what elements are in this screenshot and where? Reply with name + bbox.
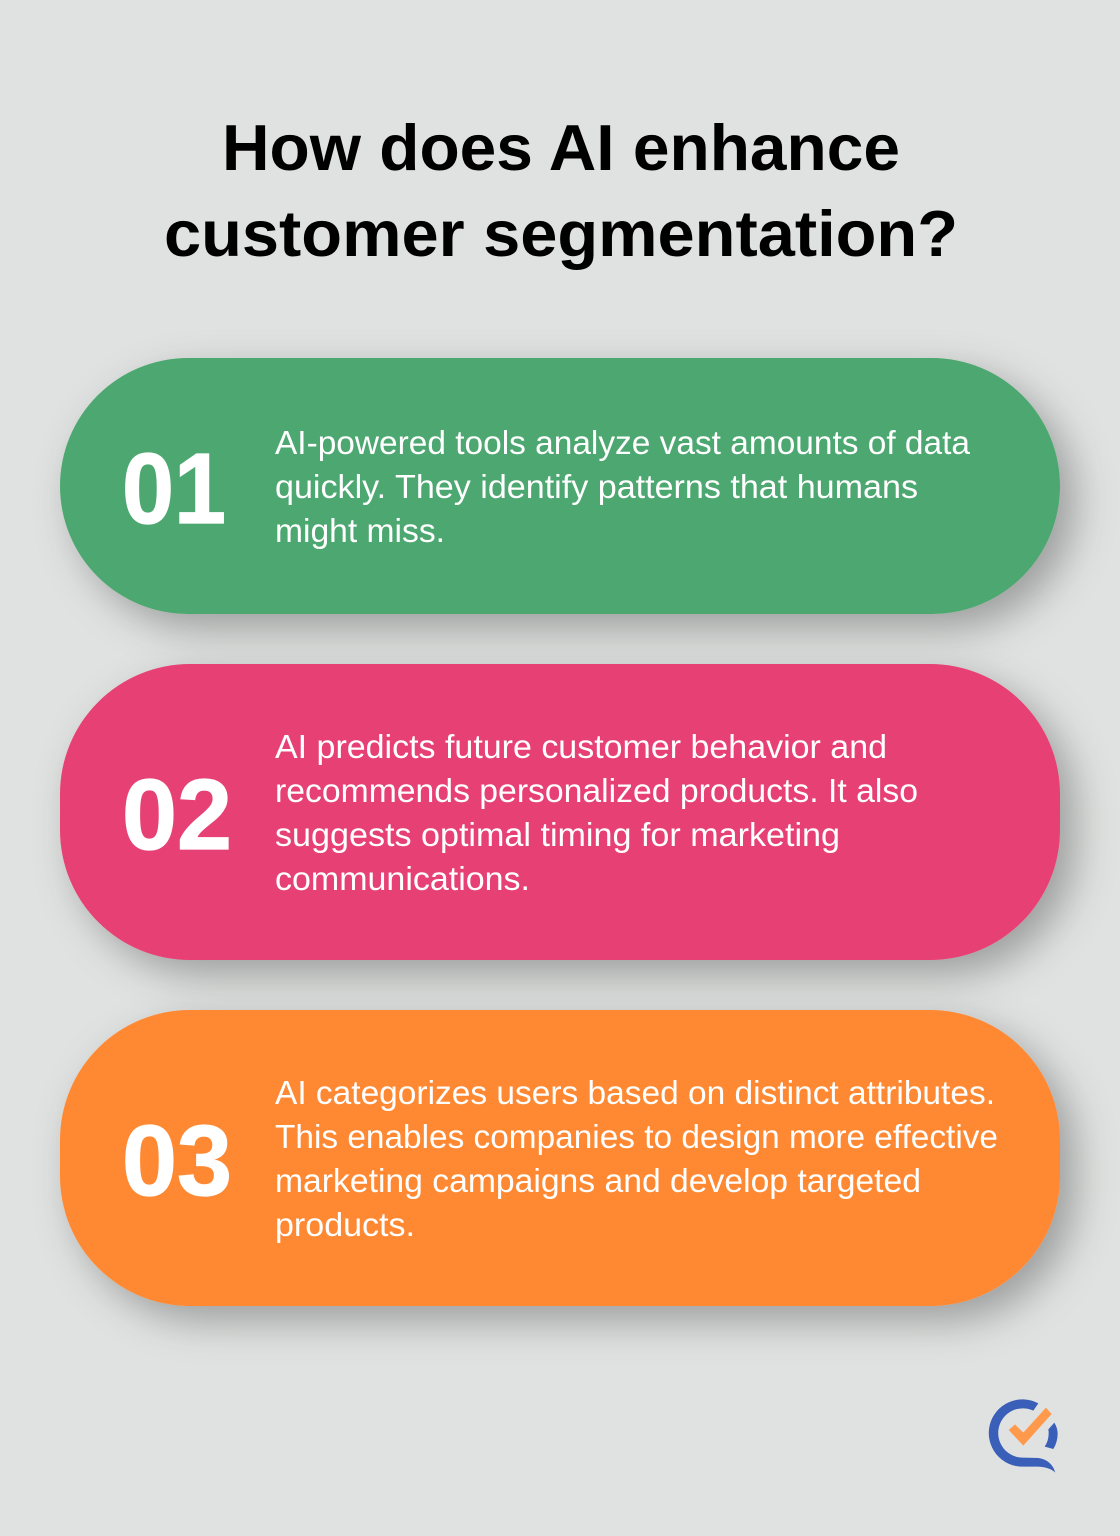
panel: step 03 [60,1010,1060,1306]
description 03: marketing campaigns and develop targeted [275,1162,921,1199]
orange pill card [60,1010,1060,1306]
description 02: communications. [275,860,530,897]
title: customer segmentation? [164,197,958,270]
description 01: AI-powered tools analyze vast amounts of data [275,424,971,461]
description 01 [275,424,971,549]
number 03: 03 [122,1105,232,1217]
description 01: quickly. They identify patterns that humans [275,468,918,505]
number 02: 02 [122,759,232,871]
icon: chat bubble check logo [989,1399,1058,1473]
title: How does AI enhance [222,111,900,184]
description 02: recommends personalized products. It also [275,772,918,809]
title [164,111,958,270]
description 03: AI categorizes users based on distinct attributes. [275,1074,995,1111]
description 01: might miss. [275,512,445,549]
pink pill card [60,664,1060,960]
description 02: AI predicts future customer behavior and [275,728,887,765]
description 02: suggests optimal timing for marketing [275,816,840,853]
number 01: 01 [122,433,226,545]
panel: step 01 [60,358,1060,614]
description 03 [275,1074,998,1243]
description 03: products. [275,1206,415,1243]
description 02 [275,728,918,897]
green pill card [60,358,1060,614]
panel: step 02 [60,664,1060,960]
description 03: This enables companies to design more effective [275,1118,998,1155]
